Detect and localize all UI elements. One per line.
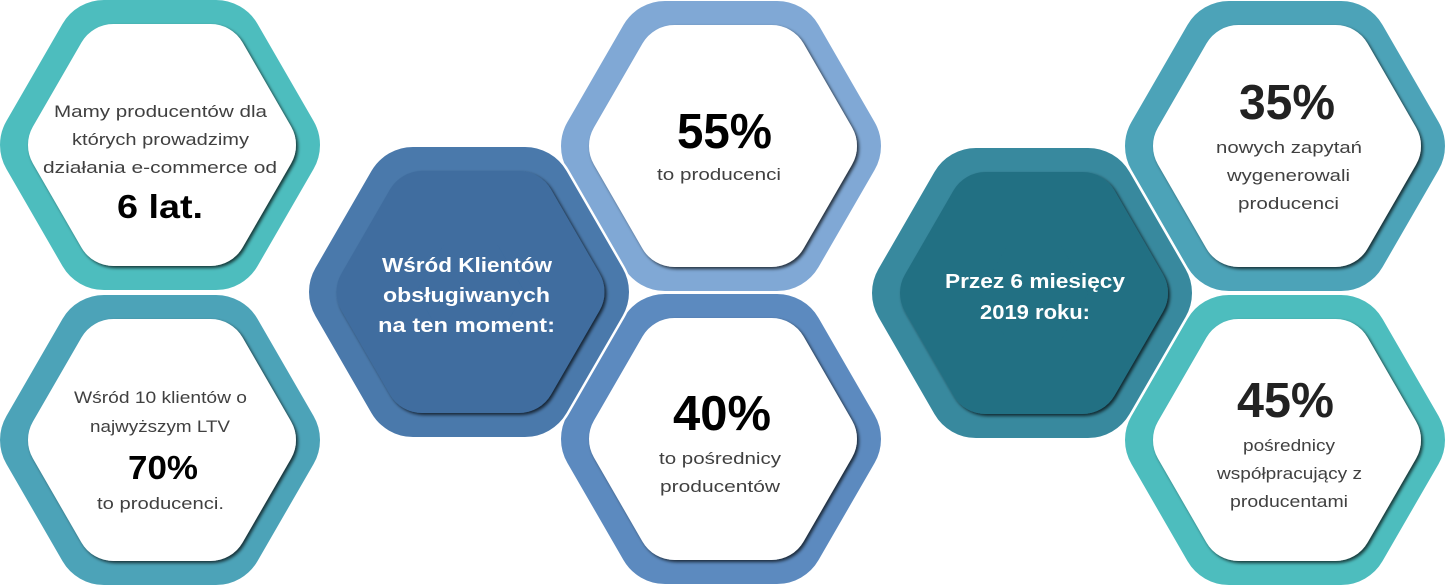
text: clients heading: na ten moment:	[378, 315, 555, 337]
text: 35% inquiries: 35%	[1239, 76, 1335, 130]
outer ring	[609, 342, 833, 536]
text: 35% inquiries: producenci	[1238, 194, 1339, 213]
inner white panel	[65, 356, 259, 524]
text: 6 years: których prowadzimy	[72, 130, 250, 149]
hexagon: 40% intermediaries	[609, 342, 833, 536]
text: 40% intermediaries: to pośrednicy	[659, 449, 782, 468]
hexagon: clients heading	[357, 195, 581, 389]
outer ring	[1173, 343, 1397, 537]
text: 45% intermediaries: pośrednicy	[1243, 436, 1336, 455]
text: 45% intermediaries: 45%	[1237, 374, 1334, 428]
text: 40% intermediaries	[659, 387, 782, 496]
text: 6 years: 6 lat.	[117, 188, 203, 225]
text: 6 years	[43, 102, 277, 225]
text: 70% LTV: Wśród 10 klientów o	[74, 388, 247, 407]
text: 6 years: Mamy producentów dla	[54, 102, 268, 121]
inner white panel	[1190, 62, 1384, 230]
text: 45% intermediaries: współpracujący z	[1216, 464, 1362, 483]
text: 70% LTV: to producenci.	[97, 494, 224, 513]
text: clients heading: Wśród Klientów	[382, 255, 552, 277]
text: clients heading	[378, 255, 555, 337]
text: 55% producers: to producenci	[657, 165, 781, 184]
inner white panel	[1190, 356, 1384, 524]
text: 35% inquiries: wygenerowali	[1226, 166, 1350, 185]
text: clients heading: obsługiwanych	[383, 285, 550, 307]
text: 40% intermediaries: producentów	[660, 477, 781, 496]
inner white panel	[626, 62, 820, 230]
white outline	[920, 196, 1144, 390]
inner white panel	[626, 355, 820, 523]
text: six months heading: 2019 roku:	[980, 302, 1090, 324]
text: 40% intermediaries: 40%	[673, 387, 771, 441]
white outline	[357, 195, 581, 389]
text: 45% intermediaries: producentami	[1230, 492, 1348, 511]
hexagon: 45% intermediaries	[1173, 343, 1397, 537]
outer ring	[609, 49, 833, 243]
text: six months heading	[945, 271, 1126, 324]
outer ring	[48, 343, 272, 537]
inner panel	[374, 208, 568, 376]
outer ring	[920, 196, 1144, 390]
outer ring	[357, 195, 581, 389]
hexagon: 35% inquiries	[1173, 49, 1397, 243]
inner white panel	[65, 61, 259, 229]
text: 35% inquiries	[1216, 76, 1362, 213]
hexagon: 70% LTV	[48, 343, 272, 537]
text: 6 years: działania e-commerce od	[43, 158, 277, 177]
hexagon: 55% producers	[609, 49, 833, 243]
hexagon: six months heading	[920, 196, 1144, 390]
outer ring	[1173, 49, 1397, 243]
outer ring	[48, 48, 272, 242]
text: 45% intermediaries	[1216, 374, 1362, 511]
text: 55% producers: 55%	[677, 105, 772, 159]
text: 35% inquiries: nowych zapytań	[1216, 138, 1362, 157]
text: six months heading: Przez 6 miesięcy	[945, 271, 1126, 293]
hexagon: 6 years	[43, 48, 277, 242]
text: 70% LTV: 70%	[128, 449, 198, 486]
inner panel	[937, 209, 1131, 377]
text: 70% LTV	[74, 388, 247, 513]
text: 70% LTV: najwyższym LTV	[90, 417, 231, 436]
text: 55% producers	[657, 105, 781, 184]
